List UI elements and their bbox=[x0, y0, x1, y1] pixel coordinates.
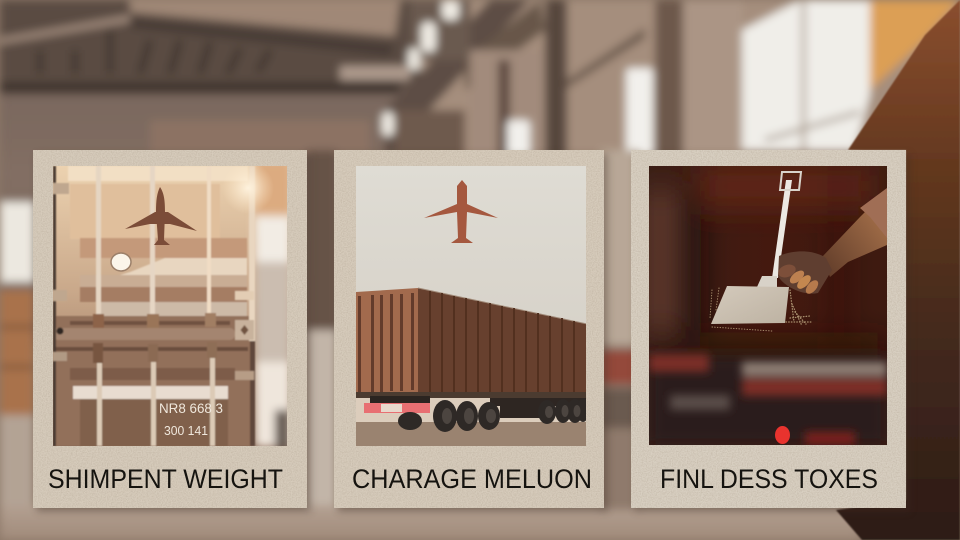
panel: final taxes card bbox=[631, 150, 910, 512]
icon: scoop blade bbox=[711, 286, 789, 324]
red light bbox=[775, 426, 790, 444]
container side face bbox=[418, 288, 587, 392]
ground bbox=[356, 422, 586, 446]
label: shipment weight: SHIMPENT WEIGHT bbox=[48, 464, 283, 494]
icon: airplane in sky bbox=[424, 180, 498, 243]
photo: container truck bbox=[355, 166, 589, 446]
chassis bbox=[356, 392, 587, 398]
panel: shipment weight card bbox=[33, 150, 311, 512]
label: charge: CHARAGE MELUON bbox=[352, 464, 592, 494]
container rear face bbox=[356, 288, 418, 395]
container codes: 300 141 bbox=[164, 423, 208, 438]
container codes: NR8 668 3 bbox=[159, 400, 223, 416]
label: final taxes: FINL DESS TOXES bbox=[660, 464, 878, 494]
icon: airplane on door bbox=[125, 187, 197, 245]
panel: charge card bbox=[334, 150, 608, 512]
scoop dust bbox=[710, 288, 812, 331]
photo: hand with scoop bbox=[649, 166, 887, 445]
wheels bbox=[398, 398, 589, 432]
arm and hand bbox=[776, 188, 887, 296]
photo: container doors bbox=[53, 160, 291, 450]
tail lights bbox=[364, 403, 430, 413]
icon: scoop handle bbox=[757, 172, 801, 287]
container codes bbox=[160, 404, 222, 435]
icon: hole in container bbox=[111, 253, 131, 271]
